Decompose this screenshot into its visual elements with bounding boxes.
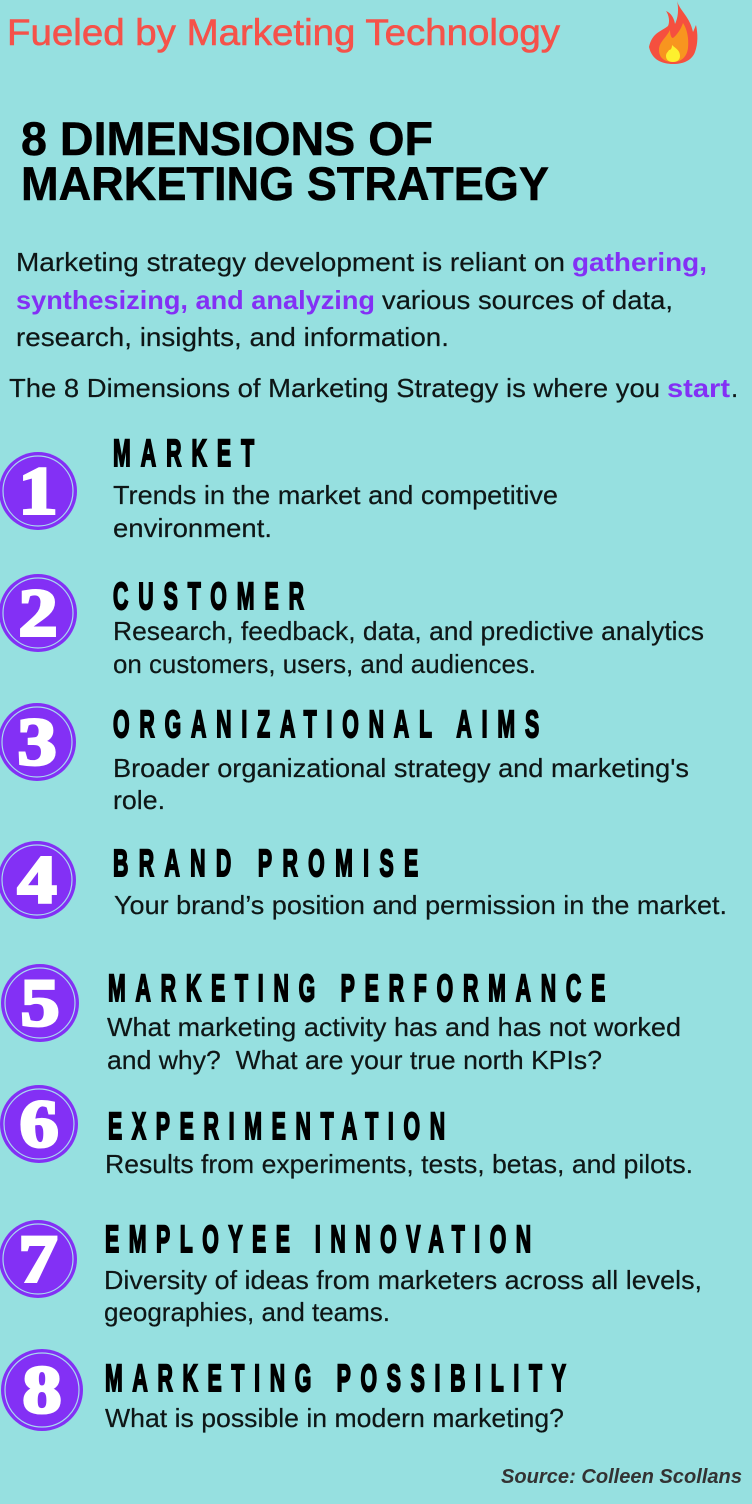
description: customer	[113, 616, 704, 679]
dimension 2: customer	[0, 574, 704, 679]
dimension 1: market	[0, 431, 558, 543]
header title: Fueled by Marketing Technology	[7, 12, 561, 53]
description: organizational aims	[113, 753, 689, 815]
description: customer: on customers, users, and audiences.	[113, 649, 536, 679]
intro paragraph	[16, 247, 707, 352]
intro statement: .	[731, 373, 738, 403]
number badge 6	[0, 1085, 78, 1163]
description: marketing performance	[107, 1012, 681, 1075]
number badge 4: 4	[17, 842, 57, 917]
description: market: environment.	[113, 513, 272, 543]
description: marketing performance: and why? What are your true north KPIs?	[107, 1045, 602, 1075]
source credit: Source: Colleen Scollans	[501, 1466, 742, 1488]
description: market	[113, 480, 558, 543]
main heading	[21, 112, 549, 210]
number badge 4	[0, 841, 76, 919]
intro paragraph: research, insights, and information.	[16, 322, 449, 352]
heading: employee innovation: EMPLOYEE INNOVATION	[105, 1217, 531, 1261]
dimension 8: marketing possibility	[1, 1349, 566, 1433]
heading: marketing performance: MARKETING PERFORMANCE	[108, 966, 605, 1010]
description: marketing performance: What marketing activity has and has not worked	[107, 1012, 681, 1042]
number badge 3	[0, 703, 76, 781]
number badge 3: 3	[17, 704, 57, 779]
dimension 5: marketing performance	[1, 964, 681, 1075]
number badge 1: 1	[18, 453, 58, 528]
number badge 5	[1, 964, 79, 1042]
description: employee innovation: geographies, and teams.	[104, 1297, 390, 1327]
number badge 5: 5	[20, 965, 60, 1040]
dimension 4: brand promise	[0, 841, 727, 920]
intro statement: The 8 Dimensions of Marketing Strategy is where you	[9, 373, 660, 403]
intro paragraph: Marketing strategy development is reliant on	[16, 247, 565, 277]
number badge 6: 6	[19, 1086, 59, 1161]
heading: experimentation: EXPERIMENTATION	[108, 1104, 445, 1148]
description: marketing possibility: What is possible in modern marketing?	[105, 1403, 564, 1433]
intro paragraph: gathering,	[572, 247, 707, 277]
heading: organizational aims: ORGANIZATIONAL AIMS	[113, 702, 539, 746]
main heading: MARKETING STRATEGY	[21, 157, 549, 210]
icon: flame	[649, 1, 697, 64]
intro statement: start	[667, 373, 730, 403]
number badge 7	[0, 1220, 77, 1298]
heading: customer: CUSTOMER	[113, 574, 304, 618]
description: market: Trends in the market and competitive	[113, 480, 558, 510]
heading: market: MARKET	[113, 431, 254, 475]
intro paragraph: synthesizing, and analyzing	[16, 285, 375, 315]
number badge 8	[1, 1349, 83, 1431]
heading: marketing possibility: MARKETING POSSIBILITY	[105, 1356, 566, 1400]
description: employee innovation	[104, 1265, 702, 1327]
description: organizational aims: role.	[113, 785, 165, 815]
description: experimentation: Results from experiments, tests, betas, and pilots.	[105, 1149, 693, 1179]
number badge 2: 2	[18, 575, 58, 650]
number badge 8: 8	[22, 1352, 62, 1427]
main heading: 8 DIMENSIONS OF	[21, 112, 433, 165]
intro paragraph: various sources of data,	[382, 285, 673, 315]
description: employee innovation: Diversity of ideas from marketers across all levels,	[104, 1265, 702, 1295]
number badge 2	[0, 574, 77, 652]
heading: brand promise: BRAND PROMISE	[113, 841, 418, 885]
number badge 7: 7	[18, 1221, 58, 1296]
dimension 3: organizational aims	[0, 702, 689, 815]
description: customer: Research, feedback, data, and predictive analytics	[113, 616, 704, 646]
dimension 7: employee innovation	[0, 1217, 702, 1327]
description: organizational aims: Broader organizational strategy and marketing's	[113, 753, 689, 783]
dimension 6: experimentation	[0, 1085, 693, 1179]
description: brand promise: Your brand’s position and permission in the market.	[114, 890, 727, 920]
number badge 1	[0, 452, 77, 530]
